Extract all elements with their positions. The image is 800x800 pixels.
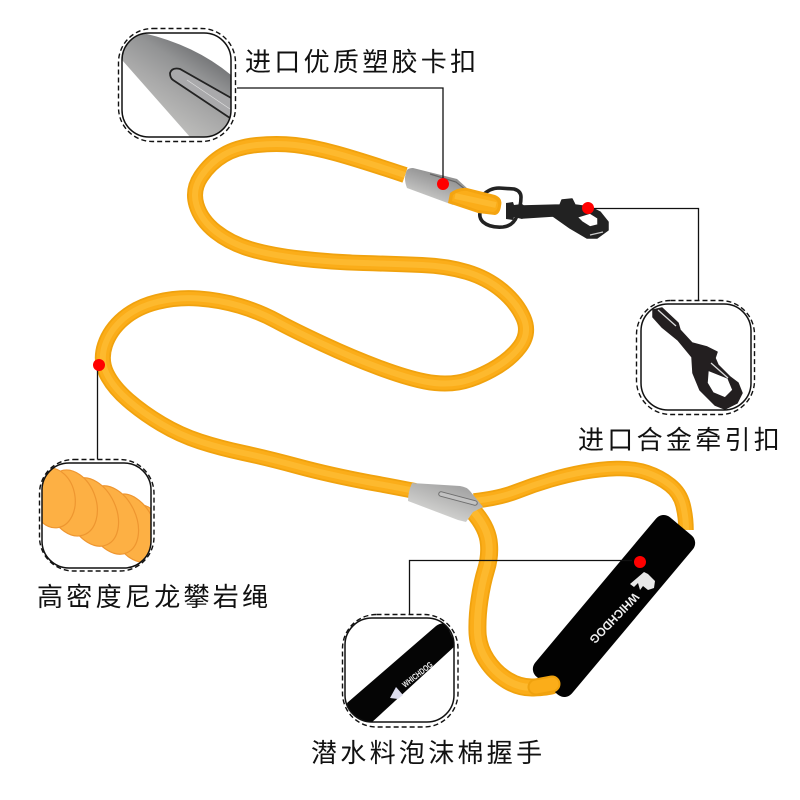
inset: climbing rope detail (38, 458, 155, 572)
clip slot (430, 174, 466, 190)
label: foam grip: 潜水料泡沫棉握手 (311, 738, 545, 768)
grip logo mark (390, 687, 403, 699)
leash rope (103, 144, 686, 688)
foam grip handle (529, 511, 699, 701)
slot on clip (170, 68, 233, 120)
label: climbing rope: 高密度尼龙攀岩绳 (37, 582, 271, 612)
line to grip (410, 560, 632, 615)
leader lines (98, 88, 698, 615)
inset: foam grip detail (342, 614, 458, 727)
slot highlight (187, 80, 230, 109)
marker dots (93, 178, 646, 568)
clip surface photo (122, 33, 231, 137)
plastic clip: upper (405, 168, 468, 205)
hook highlight (590, 232, 603, 235)
line to rope (96, 365, 98, 460)
line to snap hook (588, 208, 698, 301)
inset: plastic clip detail (118, 28, 236, 142)
hook photo (653, 308, 742, 409)
swivel ring (480, 188, 521, 227)
hook body (522, 199, 608, 238)
rope: main length from clip to sleeve (103, 144, 526, 491)
handle logo mark (630, 572, 655, 590)
rope: upper handle branch (474, 468, 686, 530)
rope entering handle (536, 684, 552, 687)
handle brand text: WHICHDOG (587, 590, 642, 646)
grip brand text: WHICHDOG (400, 659, 435, 690)
inset: snap hook detail (636, 300, 754, 414)
clip slot (441, 494, 475, 503)
swivel bolt (506, 202, 526, 220)
label: snap hook: 进口合金牵引扣 (578, 425, 783, 455)
black grip band (347, 624, 456, 724)
label: plastic clip: 进口优质塑胶卡扣 (245, 47, 479, 77)
line to plastic clip (237, 88, 443, 184)
snap hook hardware (480, 188, 608, 238)
plastic clip: lower (408, 483, 483, 522)
rope end at swivel (448, 188, 501, 215)
coiled rope photo (42, 468, 150, 562)
rope: lower handle branch (473, 511, 553, 688)
hook highlight (658, 310, 728, 378)
